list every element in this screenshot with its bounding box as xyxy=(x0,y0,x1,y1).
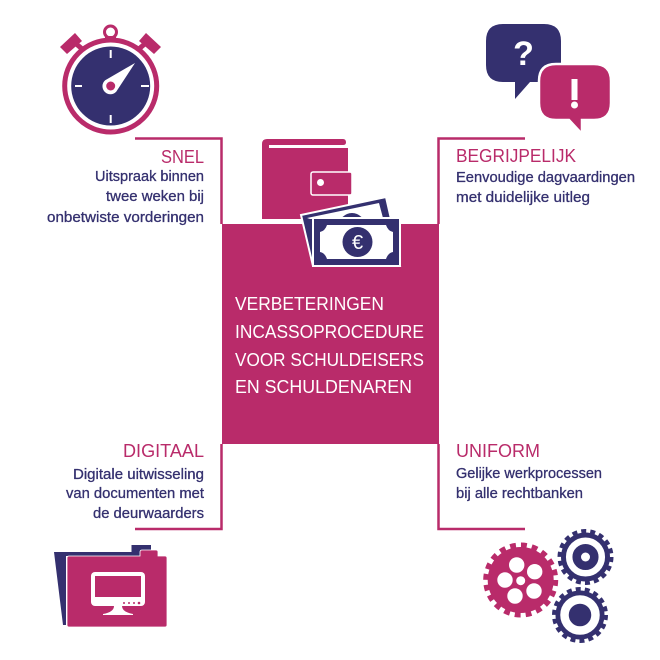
block: begrijpelijk xyxy=(456,146,635,206)
center panel xyxy=(222,224,439,444)
center title: INCASSOPROCEDURE xyxy=(235,322,424,342)
block: uniform: bij alle rechtbanken xyxy=(456,486,583,502)
block: begrijpelijk: BEGRIJPELIJK xyxy=(456,146,576,166)
block: digitaal: de deurwaarders xyxy=(93,506,204,522)
icon: wallet with banknotes xyxy=(262,139,400,266)
connector: bottom right xyxy=(438,444,525,529)
center title xyxy=(235,294,424,397)
block: digitaal: van documenten met xyxy=(66,486,204,502)
center title: VOOR SCHULDEISERS xyxy=(235,350,424,370)
icon: stopwatch xyxy=(60,26,161,132)
icon: speech bubbles xyxy=(486,24,611,134)
center title: EN SCHULDENAREN xyxy=(235,377,412,397)
block: digitaal xyxy=(66,441,204,522)
block: begrijpelijk: met duidelijke uitleg xyxy=(456,190,590,206)
block: snel: onbetwiste vorderingen xyxy=(47,210,204,226)
block: snel: twee weken bij xyxy=(106,189,204,205)
block: uniform: Gelijke werkprocessen xyxy=(456,466,602,482)
block: snel xyxy=(47,147,204,226)
icon: wallet with banknotes: € xyxy=(352,232,363,254)
icon: folder with monitor xyxy=(54,545,167,627)
connector: bottom left xyxy=(135,444,222,529)
block: uniform: UNIFORM xyxy=(456,441,540,461)
block: begrijpelijk: Eenvoudige dagvaardingen xyxy=(456,170,635,186)
center title: VERBETERINGEN xyxy=(235,294,384,314)
connector: top right xyxy=(438,138,525,224)
block: snel: SNEL xyxy=(161,147,204,167)
block: digitaal: Digitale uitwisseling xyxy=(73,467,204,483)
block: snel: Uitspraak binnen xyxy=(95,169,204,185)
block: uniform xyxy=(456,441,602,502)
block: digitaal: DIGITAAL xyxy=(123,441,204,461)
icon: gears xyxy=(486,531,612,641)
connector: top left xyxy=(135,138,222,224)
icon: speech bubbles: ? xyxy=(513,35,534,73)
